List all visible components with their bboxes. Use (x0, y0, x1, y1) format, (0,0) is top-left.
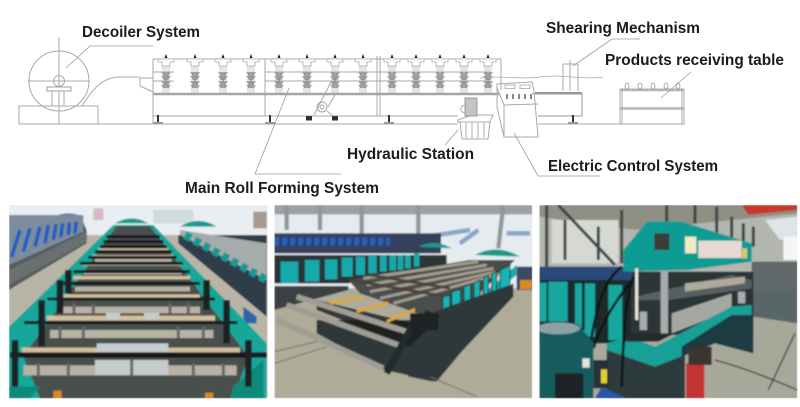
hydraulic station drawing (458, 98, 493, 139)
leader lines (66, 39, 691, 176)
main roll forming frame (19, 54, 685, 124)
flywheel and motor mounts (306, 82, 338, 120)
panel: line schematic (19, 20, 784, 197)
label: Products receiving table: Products receiving table (605, 52, 784, 69)
label: Shearing Mechanism: Shearing Mechanism (546, 20, 700, 37)
label: Hydraulic Station: Hydraulic Station (347, 146, 474, 163)
label: Main Roll Forming System: Main Roll Forming System (185, 180, 379, 197)
electric control system drawing (497, 82, 538, 137)
photo: machine from exit end (274, 205, 532, 398)
products receiving table drawing (620, 83, 684, 124)
photo: close-up of shearing unit (537, 205, 797, 398)
label: Electric Control System: Electric Control System (548, 158, 718, 175)
photo: front view of forming line (9, 205, 268, 398)
shearing mechanism drawing (480, 60, 603, 123)
label: Decoiler System: Decoiler System (82, 24, 200, 41)
decoiler system drawing (19, 37, 140, 124)
